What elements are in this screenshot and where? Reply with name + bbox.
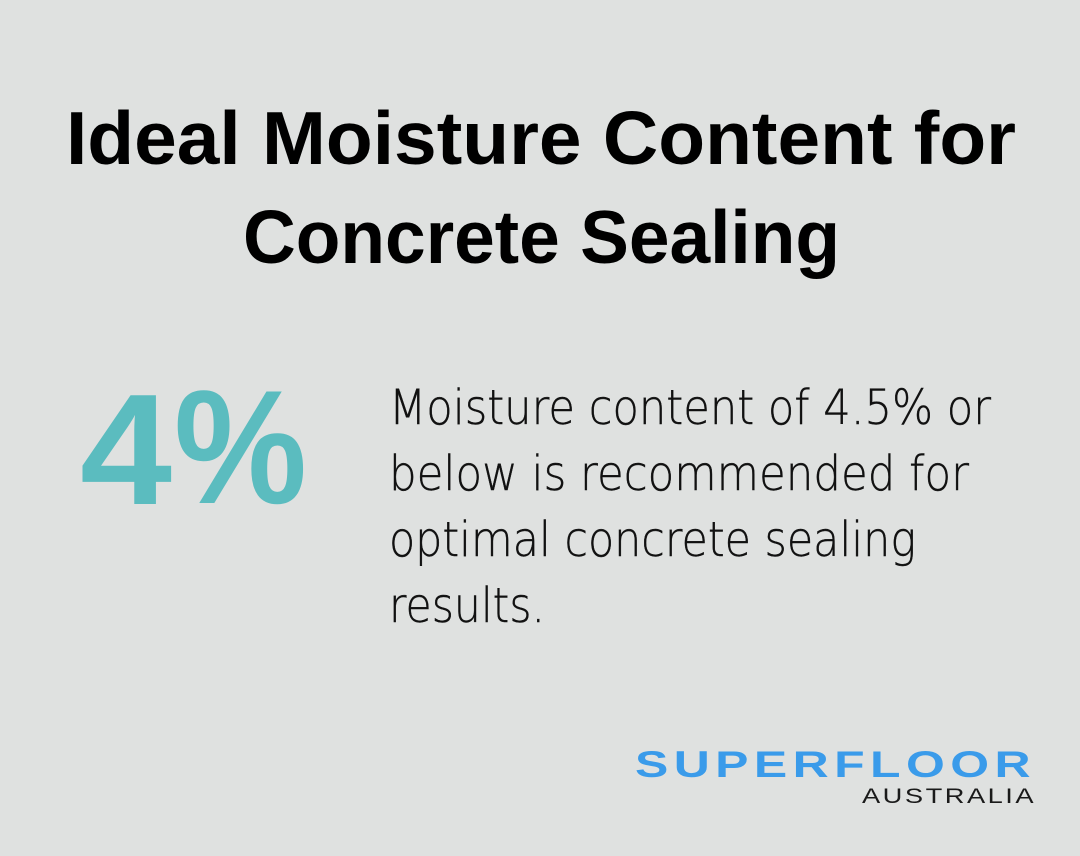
description text: results. — [389, 578, 545, 634]
big stat: 4%: 4 — [80, 362, 172, 538]
big stat: 4%: % — [174, 357, 307, 538]
title: Ideal Moisture Content for — [66, 96, 1016, 180]
title: Concrete Sealing — [243, 195, 840, 279]
logo: Superfloor Australia: SUPERFLOOR — [635, 744, 1031, 785]
description text: Moisture content of 4.5% or — [389, 380, 991, 436]
big stat: 4% — [80, 357, 307, 538]
logo: Superfloor Australia — [635, 744, 1034, 808]
title — [66, 96, 1016, 279]
logo: Superfloor Australia: AUSTRALIA — [862, 785, 1034, 808]
description text: below is recommended for — [389, 446, 969, 502]
description text — [389, 380, 991, 634]
description text: optimal concrete sealing — [389, 512, 916, 568]
